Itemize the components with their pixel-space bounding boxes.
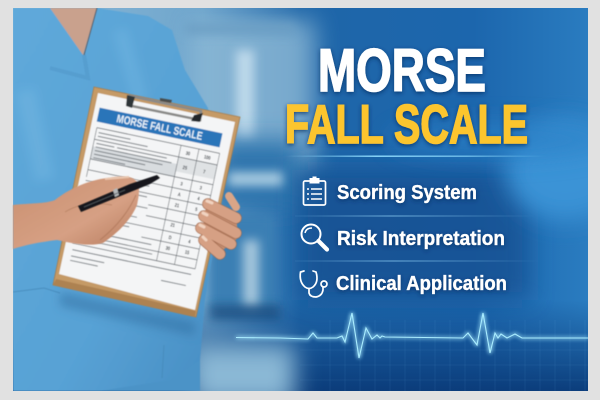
icon: magnifying glass — [302, 224, 327, 250]
metal clip — [126, 95, 203, 122]
form score values: 30 — [165, 245, 171, 252]
form header bar — [97, 108, 222, 147]
icon: clipboard — [304, 177, 326, 205]
label: Scoring System — [337, 181, 477, 204]
clipboard board — [53, 87, 240, 317]
paper form — [59, 93, 235, 310]
item: clinical application — [300, 271, 507, 297]
form small text lines — [70, 132, 216, 286]
item: risk interpretation — [302, 224, 505, 250]
left hand and forearm — [13, 176, 139, 249]
title — [285, 37, 528, 155]
label: Risk Interpretation — [337, 227, 505, 250]
ECG heartbeat line — [236, 313, 588, 358]
right hand holding the clipboard — [200, 196, 238, 254]
form content, mapped on to the paper's plane — [67, 108, 224, 287]
pants and pocket lines — [13, 288, 60, 293]
form score values: 21 — [170, 222, 176, 228]
form score values: 3 — [180, 181, 184, 187]
form score values: 25 — [182, 165, 188, 171]
label: Clinical Application — [336, 272, 507, 295]
pen — [78, 175, 160, 212]
form score values: 15 — [184, 249, 190, 256]
form score values: 7 — [203, 169, 206, 175]
form score table — [72, 128, 220, 269]
person in blue scrubs — [13, 8, 222, 391]
form score values: 3 — [199, 185, 203, 191]
form score values: 30 — [185, 150, 191, 157]
divider — [295, 260, 540, 262]
neck skin — [50, 8, 97, 55]
title line: MORSE: MORSE — [318, 37, 486, 104]
icon: stethoscope — [300, 271, 327, 297]
scrub top — [13, 8, 222, 391]
form score values: A — [177, 192, 182, 198]
form score values: 4 — [188, 239, 191, 245]
ECG grid — [314, 340, 588, 391]
form score values — [165, 150, 211, 256]
title underline — [285, 156, 545, 157]
form score values: 100 — [203, 154, 211, 161]
item: scoring system — [304, 177, 477, 205]
form score values: 5 — [195, 206, 198, 212]
form score values: 4 — [197, 196, 201, 202]
form header bar: MORSE FALL SCALE — [115, 113, 204, 143]
form score values: D — [168, 235, 173, 241]
divider — [295, 216, 535, 217]
form score values: 21 — [174, 202, 180, 209]
clipboard — [53, 87, 240, 317]
